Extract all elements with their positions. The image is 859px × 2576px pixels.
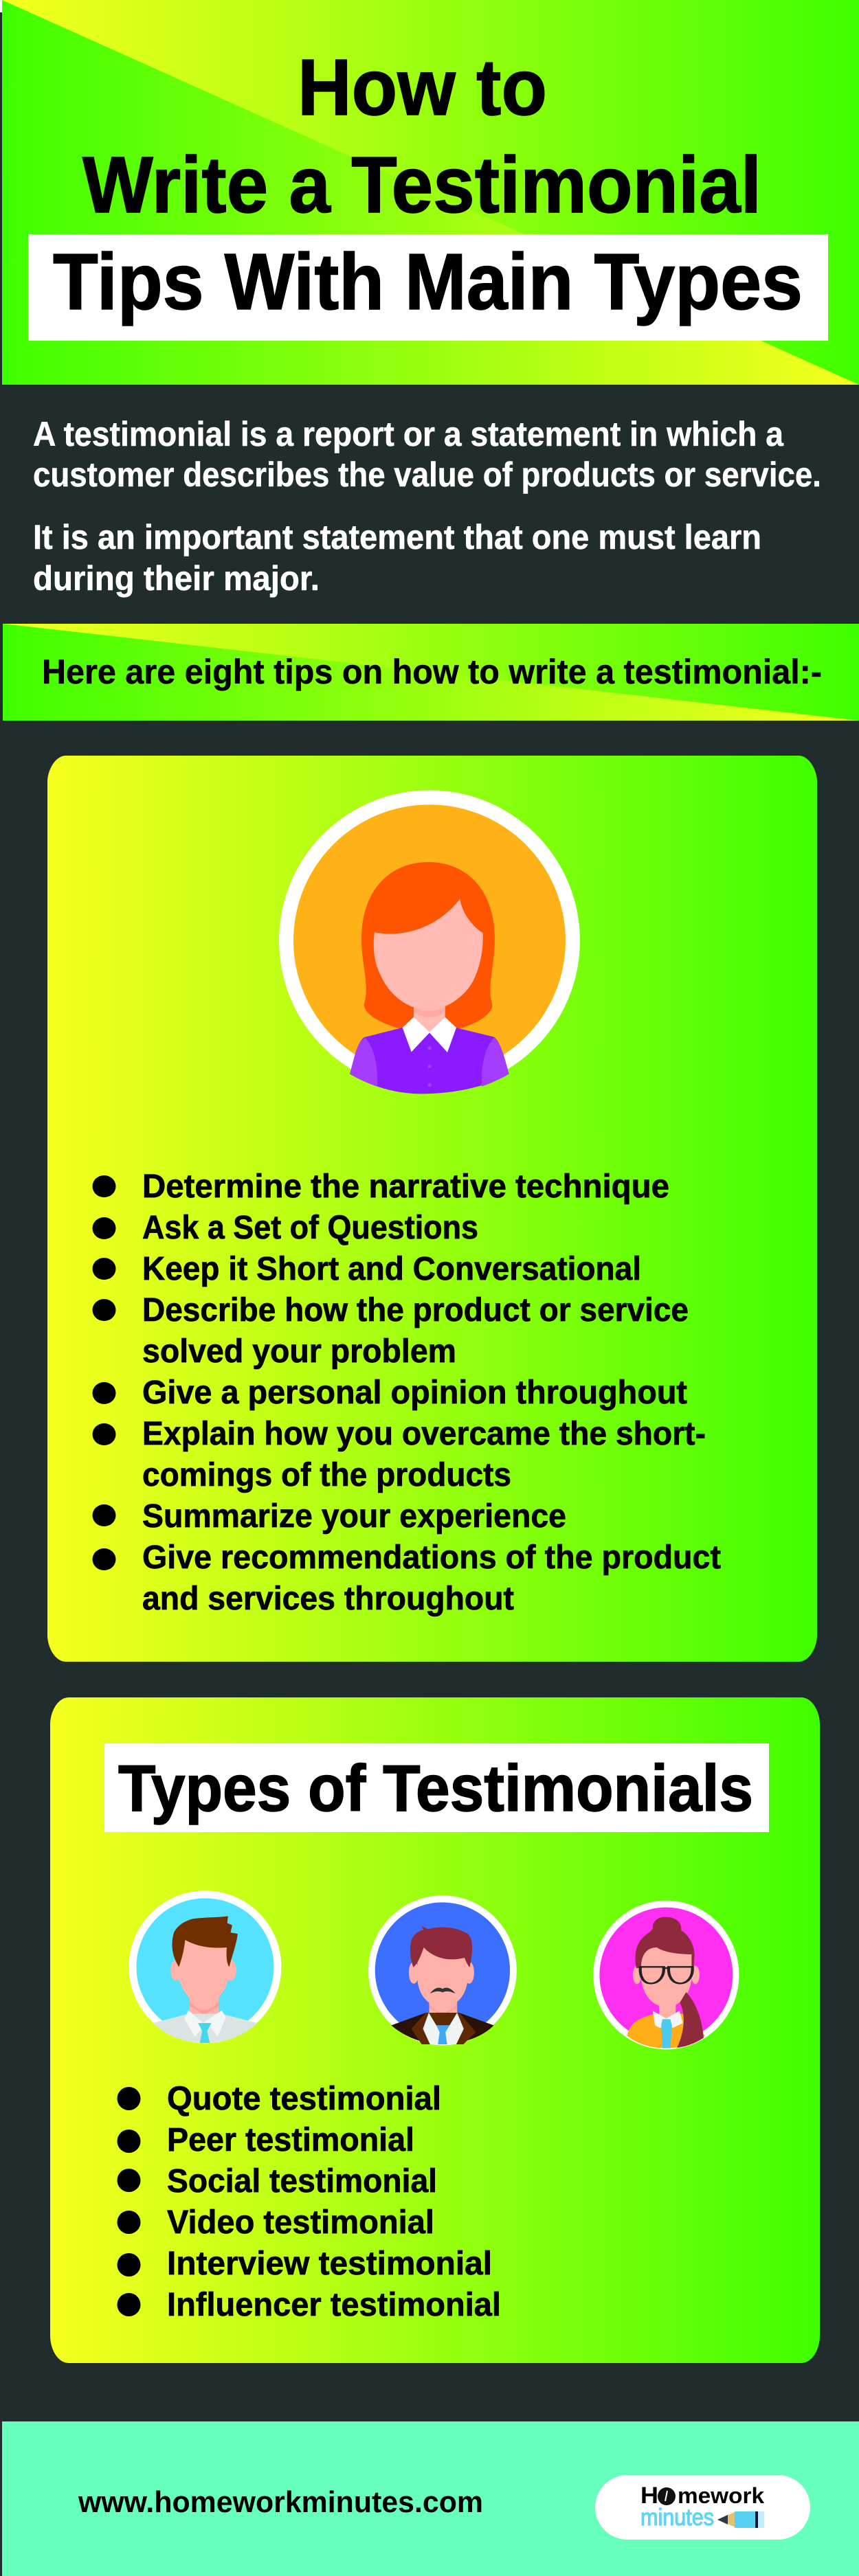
logo: Homework minutes — [595, 2475, 810, 2540]
title box: Tips With Main Types: Tips With Main Types — [53, 237, 803, 326]
footer band — [2, 2421, 859, 2576]
bullet list: types: Video testimonial — [167, 2204, 434, 2241]
intro paragraph: A testimonial is a report or a statement in which a — [33, 415, 784, 453]
title: Write a Testimonial: Write a Testimonial — [82, 140, 761, 229]
icon: female avatar glasses — [593, 1901, 739, 2049]
bullet list: tips — [92, 1168, 721, 1617]
bullet list: types: Peer testimonial — [167, 2122, 414, 2158]
logo: Homework minutes: mework — [678, 2483, 764, 2508]
bullet list: types — [117, 2081, 501, 2323]
icon: male avatar blue — [129, 1890, 281, 2043]
icon: male avatar moustache — [368, 1895, 517, 2045]
bullet list: types: Social testimonial — [167, 2163, 437, 2200]
bullet list: tips: Keep it Short and Conversational — [142, 1251, 641, 1287]
bullet list: tips: and services throughout — [142, 1581, 514, 1617]
intro paragraph: It is an important statement that one must learn — [33, 518, 761, 556]
icon: woman avatar — [279, 790, 580, 1094]
bullet list: tips: comings of the products — [142, 1457, 511, 1493]
intro paragraph: during their major. — [33, 559, 320, 598]
bullet list: tips: solved your problem — [142, 1333, 456, 1370]
tips strip banner — [3, 624, 859, 721]
logo: Homework minutes: minutes — [640, 2505, 714, 2531]
tips strip banner: Here are eight tips on how to write a testimonial:- — [42, 653, 822, 691]
intro paragraph — [33, 415, 821, 598]
bullet list: tips: Summarize your experience — [142, 1498, 566, 1535]
title: How to: How to — [298, 43, 547, 132]
header banner — [0, 0, 859, 385]
logo: Homework minutes: H — [640, 2483, 658, 2509]
bullet list: tips: Describe how the product or service — [142, 1292, 689, 1329]
heading box: Types of Testimonials: Types of Testimonials — [118, 1752, 753, 1825]
bullet list: types: Interview testimonial — [167, 2246, 492, 2282]
bullet list: tips: Determine the narrative technique — [142, 1168, 669, 1205]
bullet list: tips: Give recommendations of the product — [142, 1539, 721, 1576]
panel: types of testimonials — [50, 1697, 820, 2363]
panel: eight tips — [47, 756, 817, 1662]
icon: pencil — [717, 2511, 764, 2528]
bullet list: tips: Give a personal opinion throughout — [142, 1375, 687, 1411]
website url: www.homeworkminutes.com — [78, 2485, 483, 2519]
bullet list: types: Influencer testimonial — [167, 2287, 501, 2323]
bullet list: tips: Explain how you overcame the short- — [142, 1416, 706, 1452]
bullet list: tips: Ask a Set of Questions — [142, 1210, 478, 1246]
bullet list: types: Quote testimonial — [167, 2081, 441, 2117]
